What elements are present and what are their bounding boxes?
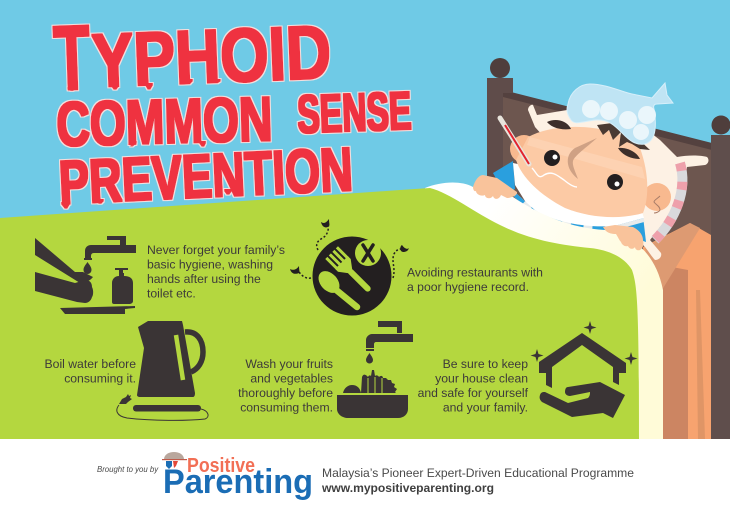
icon: house in hand [530,321,638,418]
text: wash fruits: Wash your fruits [245,357,333,371]
text: house clean: Be sure to keep [443,357,528,371]
title: SENSE [296,81,412,145]
title [52,7,412,218]
right ear [643,183,671,211]
blanket foot [643,223,711,439]
left bed post [487,78,513,190]
text: boil water [45,357,136,386]
face [516,127,647,217]
text: restaurants [407,266,543,294]
title: PREVENTION [57,135,354,218]
text: hygiene: basic hygiene, washing [147,258,273,272]
logo: Positive: Positive [187,455,255,477]
ice bag [567,83,673,144]
nose [568,138,597,179]
hair [597,122,650,150]
text: house clean [418,357,529,414]
logo emblem [162,452,187,469]
logo: Parenting: Parenting [163,463,313,501]
text: hygiene: Never forget your family’s [147,243,285,257]
brought to you by: Brought to you by [97,465,159,474]
text: house clean: and safe for yourself [418,386,529,400]
text: wash fruits: and vegetables [250,372,333,386]
text: boil water: consuming it. [64,372,136,386]
right sleeve [605,216,646,242]
title: YPHOID [90,10,332,104]
left sleeve [493,161,515,195]
headboard panel [503,92,712,300]
footer [0,439,730,516]
tagline: Malaysia’s Pioneer Expert-Driven Educational Programme [322,466,634,480]
bed sheet [425,183,663,439]
bed [487,58,730,439]
text: house clean: your house clean [435,372,528,386]
website: www.mypositiveparenting.org [321,481,494,495]
green hill [0,188,639,439]
right hand [603,225,643,250]
right bed post [711,135,730,439]
left ear [510,135,538,163]
pillow [528,105,708,260]
pillow stripes [655,163,682,240]
bib stripes [514,194,644,228]
text: wash fruits: consuming them. [240,400,333,414]
fork [325,246,376,297]
icon: fruit bowl and tap [337,321,413,418]
text: hygiene: toilet etc. [147,286,196,300]
flies [299,224,401,278]
left hand [473,175,517,199]
icon: kettle [117,321,208,420]
icon: restaurant [290,219,409,316]
text: boil water: Boil water before [45,357,136,371]
sick child [493,118,671,242]
face highlight bands [527,137,645,179]
eyebrows [547,120,640,159]
icon: washing hands [35,236,136,314]
text: restaurants: a poor hygiene record. [407,280,529,294]
text: hygiene: hands after using the [147,272,261,286]
title: T [52,7,92,110]
text: hygiene [147,243,285,300]
title: COMMON [56,84,273,160]
text: wash fruits: thoroughly before [238,386,333,400]
spoon [314,267,357,307]
text: wash fruits [238,357,333,414]
mouth [654,196,660,213]
thermometer [500,118,529,164]
text: restaurants: Avoiding restaurants with [407,266,543,280]
spit line [532,168,577,187]
text: house clean: and your family. [443,400,528,414]
eyes [544,150,560,166]
bib [513,163,644,228]
